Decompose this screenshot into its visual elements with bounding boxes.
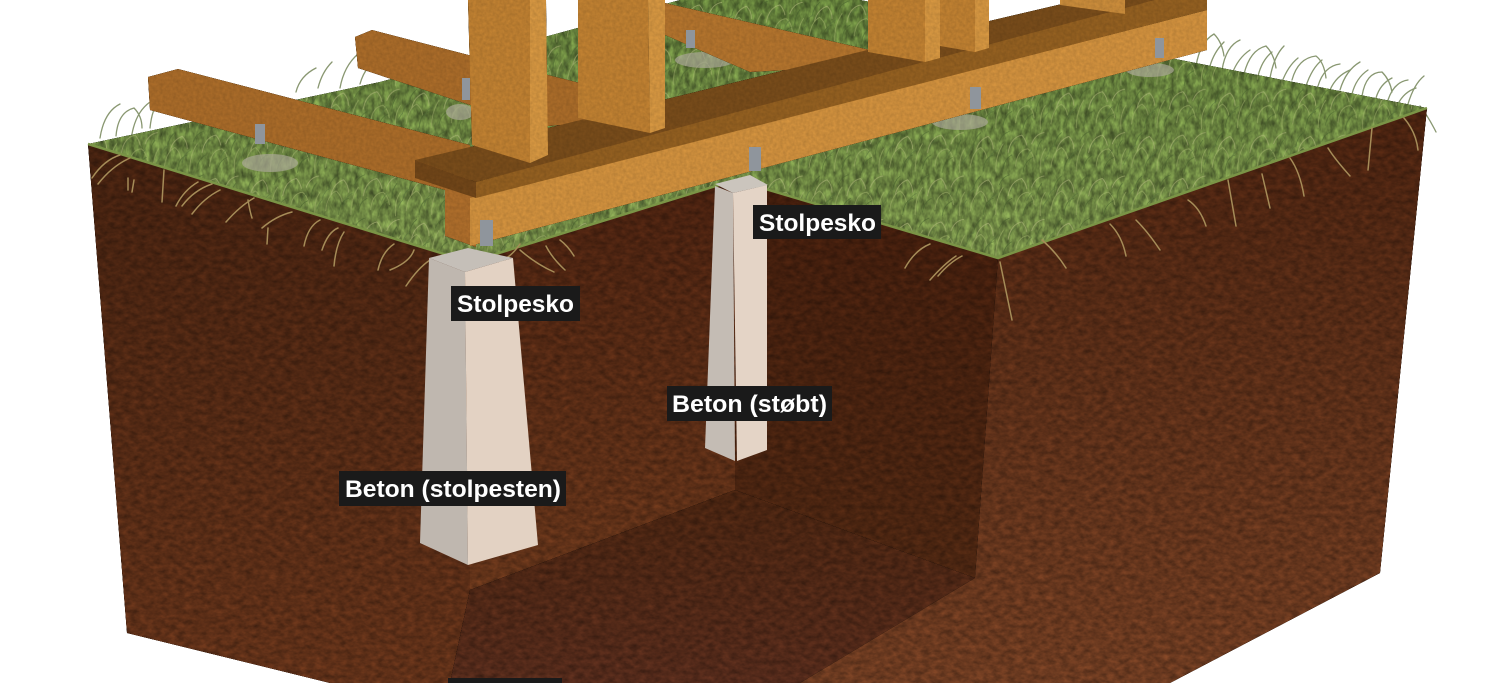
grass blades behind back edge [100,34,1436,138]
label: Beton (støbt): Beton (støbt) [672,391,827,418]
post 1 left face [468,0,530,163]
lawn surface [88,0,1427,262]
soil block: left front face [88,144,470,683]
metal brackets [255,30,1164,246]
back joist right [665,3,870,72]
post 3 right face [925,0,940,62]
upper right rail [1060,0,1125,14]
upper beam front strip [476,0,1207,198]
post 1 right face [530,0,548,163]
label: Stolpesko (front post) [451,286,580,321]
post 3 left face [868,0,925,62]
label: Beton (støbt) [667,386,832,421]
soil block: pit side wall [470,180,735,590]
concrete post B (cast) [705,175,768,461]
upper beam end face [415,160,476,198]
timber frame [148,0,1207,247]
joist middle left [355,30,600,126]
joist front left [148,69,470,198]
label: Beton (stolpesten): Beton (stolpesten) [345,476,561,503]
label: Stolpesko (rear post): Stolpesko [759,210,876,237]
post 4 right face [975,0,989,52]
lower beam end face [445,178,476,247]
roots hanging over soil edge [92,118,1418,320]
post 2 right face [648,0,665,133]
footing stones on lawn [242,52,1174,172]
lower beam front face [470,10,1207,246]
soil block: pit back wall [735,180,998,578]
label: Stolpesko (front post): Stolpesko [457,291,574,318]
cropped label box at bottom edge [448,678,562,683]
soil block: pit floor [450,490,975,683]
soil block: right face [800,108,1427,683]
upper beam top surface [415,0,1207,182]
post 4 left face [940,0,975,52]
post 2 left face [578,0,650,133]
concrete post A (stolpesten) [420,248,538,565]
